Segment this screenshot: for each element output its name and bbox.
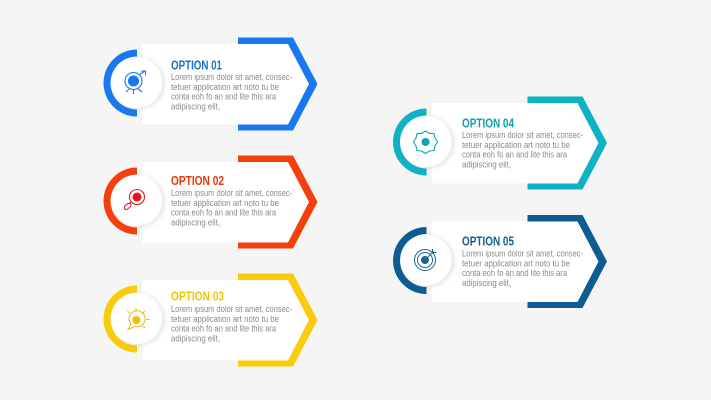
text block: adipiscing elit,	[462, 278, 511, 288]
chevron	[528, 96, 607, 190]
text block: conta eoh fo an and lite this ara	[171, 208, 276, 218]
icon circle	[111, 293, 162, 344]
white card	[432, 103, 598, 184]
white card	[142, 162, 309, 242]
text block: tetuer application art noto tu be	[462, 140, 570, 150]
text block: Lorem ipsum dolor sit amet, consec-	[462, 130, 583, 140]
panel: option 04	[393, 96, 607, 190]
icon: idea speech bulb	[128, 308, 150, 330]
text block: adipiscing elit,	[171, 102, 220, 112]
panel: option 03	[104, 274, 318, 366]
heading: OPTION 03	[171, 288, 224, 304]
panel: option 01	[104, 38, 318, 130]
text block: Lorem ipsum dolor sit amet, consec-	[171, 304, 292, 314]
semicircle arc	[104, 286, 137, 352]
icon circle	[400, 234, 452, 286]
chevron	[238, 38, 318, 130]
icon: target with arrow	[125, 71, 146, 94]
text block: conta eoh fo an and lite this ara	[462, 150, 567, 160]
heading: OPTION 02	[171, 173, 224, 188]
icon circle	[111, 175, 162, 226]
text block: conta eoh fo an and lite this ara	[171, 92, 276, 102]
icon: magnifier	[124, 190, 144, 210]
chevron	[238, 274, 318, 366]
semicircle arc	[104, 168, 137, 234]
text block: tetuer application art noto tu be	[171, 82, 279, 92]
text block: adipiscing elit,	[171, 334, 220, 344]
text block: tetuer application art noto tu be	[171, 198, 279, 208]
text block: adipiscing elit,	[462, 160, 511, 170]
icon: bullseye	[414, 249, 436, 270]
icon circle	[400, 116, 452, 167]
chevron	[528, 215, 607, 308]
text block: Lorem ipsum dolor sit amet, consec-	[171, 72, 292, 82]
text block: tetuer application art noto tu be	[171, 314, 279, 324]
chevron	[238, 156, 318, 248]
white card	[142, 280, 309, 360]
panel: option 05	[393, 215, 607, 308]
heading: OPTION 05	[462, 234, 514, 248]
white card	[432, 222, 598, 302]
semicircle arc	[393, 108, 426, 176]
semicircle arc	[104, 50, 137, 116]
text block: tetuer application art noto tu be	[462, 258, 570, 268]
text block: adipiscing elit,	[171, 218, 220, 228]
text block: conta eoh fo an and lite this ara	[462, 268, 567, 278]
text block: Lorem ipsum dolor sit amet, consec-	[171, 188, 292, 198]
heading: OPTION 01	[171, 58, 222, 72]
icon circle	[111, 57, 162, 108]
icon: gear	[414, 131, 438, 154]
semicircle arc	[393, 227, 426, 294]
text block: Lorem ipsum dolor sit amet, consec-	[462, 248, 583, 258]
heading: OPTION 04	[462, 116, 515, 130]
text block: conta eoh fo an and lite this ara	[171, 324, 276, 334]
white card	[142, 44, 309, 124]
panel: option 02	[104, 156, 318, 248]
